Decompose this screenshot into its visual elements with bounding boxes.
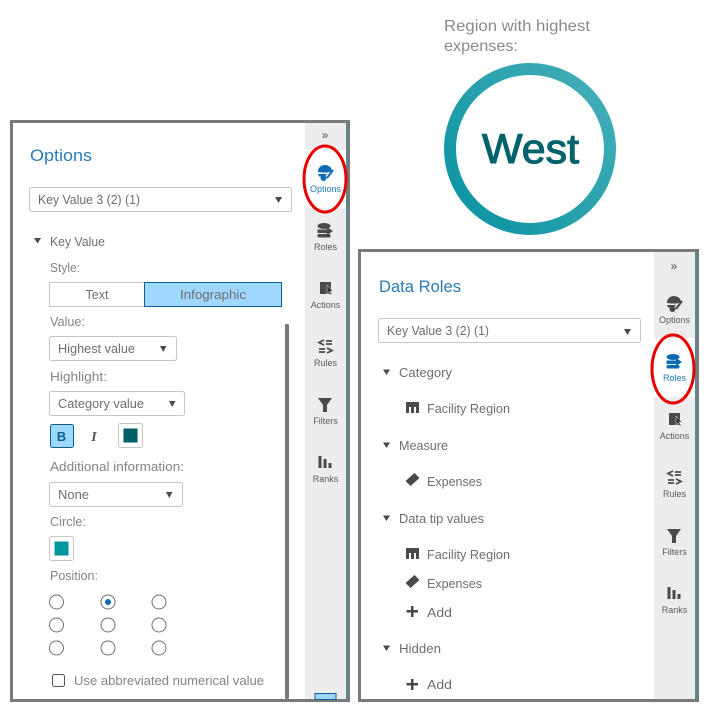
object dropdown: Key Value 3 (2) (1) [38, 193, 140, 207]
highlight control [50, 370, 184, 416]
value control: Value: [50, 315, 85, 329]
tab: actions [311, 282, 341, 310]
role: hidden [383, 642, 452, 692]
role: category: Facility Region [427, 402, 510, 416]
tab: options [659, 296, 691, 325]
section: key value: Key Value [50, 235, 105, 249]
circle color control: Circle: [50, 515, 86, 529]
panel: options [12, 122, 348, 700]
role: data tip values: Facility Region [427, 548, 510, 562]
heading: options: Options [30, 146, 92, 165]
tab: roles: Roles [663, 373, 687, 383]
data roles sidebar [654, 252, 696, 699]
tab: actions: Actions [311, 300, 341, 310]
style control: Text [86, 288, 109, 302]
tab: actions: Actions [660, 431, 690, 441]
highlight ellipse: options [304, 146, 346, 212]
style control: Infographic [180, 288, 246, 302]
icon: collapse chevrons: » [322, 128, 329, 142]
scrollbar [285, 324, 289, 699]
tab: filters [662, 529, 687, 557]
tab: roles: Roles [314, 242, 338, 252]
role: data tip values [383, 512, 510, 620]
tab: options: Options [310, 184, 342, 194]
highlight control: Highlight: [50, 370, 107, 384]
role: data tip values: Expenses [427, 577, 482, 591]
tab: filters [313, 398, 338, 426]
value West: West [482, 125, 579, 172]
icon: collapse chevrons: » [671, 259, 678, 273]
tab: ranks: Ranks [313, 474, 339, 484]
role: data tip values: Add [427, 606, 452, 620]
highlight control: Category value [58, 397, 144, 411]
tab: rules [314, 340, 338, 368]
role: hidden: Hidden [399, 642, 441, 656]
role: category: Category [399, 366, 453, 380]
tab: rules [663, 471, 687, 499]
caption: Region with highest [444, 18, 591, 35]
abbreviated value checkbox: Use abbreviated numerical value [74, 674, 264, 688]
role: measure: Expenses [427, 475, 482, 489]
tab: rules: Rules [314, 358, 338, 368]
bottom toggle [315, 694, 336, 700]
role: measure [383, 439, 482, 489]
teal circle [450, 69, 610, 229]
caption: expenses: [444, 38, 518, 55]
highlight ellipse: roles [652, 335, 694, 403]
style control: Style: [50, 261, 80, 275]
text format buttons: B [57, 429, 66, 444]
role: measure: Measure [399, 439, 448, 453]
tab: options: Options [659, 315, 691, 325]
tab: rules: Rules [663, 489, 687, 499]
position control: Position: [50, 569, 98, 583]
additional information control: Additional information: [50, 460, 184, 474]
additional information control [50, 460, 184, 506]
key value infographic [444, 18, 610, 229]
tab: ranks [662, 587, 688, 615]
options sidebar [305, 123, 348, 700]
tab: ranks [313, 456, 339, 484]
object dropdown [378, 318, 640, 342]
tab: filters: Filters [662, 547, 687, 557]
tab: options [310, 165, 342, 194]
additional information control: None [58, 488, 89, 502]
panel: data roles [360, 250, 698, 700]
value control: Highest value [58, 342, 135, 356]
object dropdown [30, 188, 292, 212]
role: data tip values: Data tip values [399, 512, 484, 526]
tab: filters: Filters [313, 416, 338, 426]
text format buttons: I [90, 430, 97, 445]
caption [444, 18, 591, 55]
tab: roles [314, 223, 338, 252]
position control [50, 569, 166, 655]
object dropdown: Key Value 3 (2) (1) [387, 324, 489, 338]
style control [50, 261, 282, 306]
heading: data roles: Data Roles [379, 277, 461, 296]
text format buttons [50, 424, 142, 448]
tab: roles [663, 354, 687, 383]
tab: ranks: Ranks [662, 605, 688, 615]
role: hidden: Add [427, 678, 452, 692]
role: category [383, 366, 510, 416]
value control [50, 315, 176, 360]
circle color control [50, 515, 86, 560]
tab: actions [660, 413, 690, 441]
